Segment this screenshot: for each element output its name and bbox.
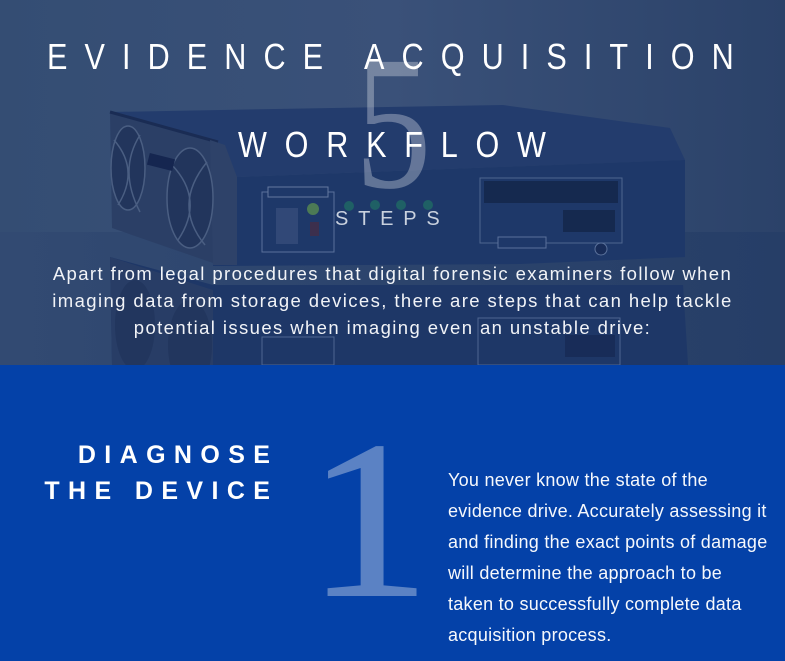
numeral 5: 5 <box>355 18 431 229</box>
step 1 heading <box>44 441 278 505</box>
photo: stacked forensic imaging devices <box>0 0 785 365</box>
step 1 description: will determine the approach to be <box>448 563 722 583</box>
step 1 description: taken to successfully complete data <box>448 594 742 614</box>
step 1 description: You never know the state of the <box>448 470 708 490</box>
step 1 description: evidence drive. Accurately assessing it <box>448 501 767 521</box>
step 1 description <box>448 470 767 645</box>
fans <box>111 126 213 248</box>
intro paragraph: imaging data from storage devices, there are steps that can help tackle <box>52 290 733 311</box>
step 1 heading: DIAGNOSE <box>78 441 278 469</box>
step 1 numeral: 1 <box>307 396 430 644</box>
intro paragraph: potential issues when imaging even an unstable drive: <box>134 317 651 338</box>
title line 1: EVIDENCE ACQUISITION <box>47 36 751 77</box>
panel: hero header <box>0 0 785 365</box>
intro paragraph <box>52 263 733 338</box>
IDE source box <box>480 178 622 243</box>
title line 2: WORKFLOW <box>238 124 564 165</box>
step 1 description: and finding the exact points of damage <box>448 532 767 552</box>
panel: step 1 diagnose the device <box>0 365 785 661</box>
lower device <box>110 257 688 365</box>
subtitle: steps: STEPS <box>335 208 450 230</box>
intro paragraph: Apart from legal procedures that digital forensic examiners follow when <box>53 263 732 284</box>
step 1 description: acquisition process. <box>448 625 611 645</box>
write protection box <box>262 192 334 252</box>
step 1 heading: THE DEVICE <box>44 477 278 505</box>
upper device <box>110 105 685 177</box>
